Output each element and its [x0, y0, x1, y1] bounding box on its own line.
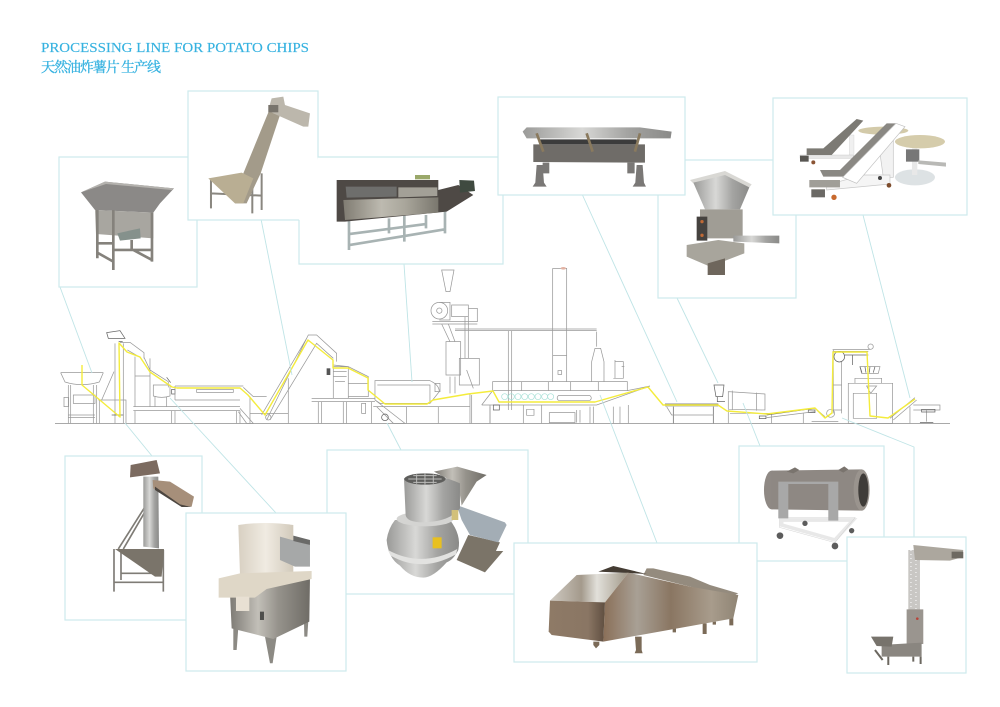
photo: fryer hood: [549, 566, 738, 653]
photo: tumbler: [764, 466, 870, 549]
panel: slicer: [327, 450, 528, 594]
photo: peeler: [219, 523, 312, 663]
photo: inclined conveyor: [208, 97, 310, 213]
drawing: feed hopper, elevator, peeler, inspection conveyor, washers: [61, 331, 470, 423]
title: [41, 40, 309, 76]
process line drawing: [55, 267, 950, 424]
photo: elevator: [114, 460, 194, 592]
title: chinese: 天然油炸薯片 生产线: [41, 59, 161, 76]
drawing: fryer, stack, seasoning drum, packing machine: [455, 267, 940, 423]
photo: feeder: [687, 171, 779, 275]
panel: fryer hood: [514, 543, 757, 662]
panel: twin feed conveyors: [773, 98, 967, 215]
panel: inclined elevator: [65, 456, 202, 620]
photo: feed hopper: [81, 182, 174, 270]
photo: bucket elevator: [871, 545, 963, 665]
panel: peeler: [186, 513, 346, 671]
panel: hopper feeder: [658, 160, 796, 298]
panel: feed hopper: [59, 157, 197, 287]
photo: slicer: [387, 467, 507, 578]
panel: roller washer: [299, 157, 503, 264]
panel: seasoning tumbler: [739, 446, 884, 561]
floor line: [55, 422, 950, 424]
drawing: slicer tower: [431, 270, 490, 423]
panel: bucket elevator: [847, 537, 966, 673]
title: english: PROCESSING LINE FOR POTATO CHIPS: [41, 40, 309, 55]
yellow product flow line: [82, 340, 915, 418]
panel: inclined bucket conveyor: [188, 91, 318, 220]
photo: twin conveyors: [800, 119, 946, 200]
panel: vibrating conveyor: [498, 97, 685, 195]
connector lines from equipment photos to process line: [60, 194, 914, 543]
photo: washer: [337, 175, 475, 250]
photo: vibrating conveyor: [523, 127, 672, 187]
